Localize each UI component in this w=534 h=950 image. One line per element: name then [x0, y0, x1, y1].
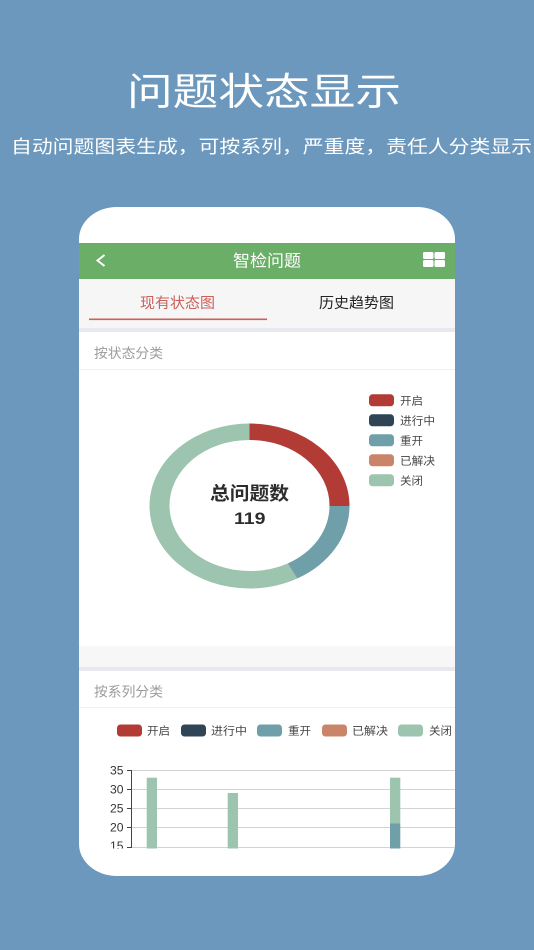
segment: open: [250, 424, 350, 506]
panel: green header bar: [79, 243, 455, 279]
legend: status chart: 开启: [400, 394, 423, 408]
legend: series chart: 开启: [147, 724, 170, 738]
tab: current status: 现有状态图: [140, 295, 215, 312]
donut total: 119: [234, 509, 266, 528]
panel: phone screen: [79, 207, 455, 876]
legend: status chart: [369, 394, 435, 488]
y axis labels: 20: [110, 822, 124, 834]
legend: status chart: 已解决: [400, 454, 435, 468]
legend: status chart: 重开: [400, 434, 423, 448]
y axis: [127, 770, 132, 848]
tab: history trend: 历史趋势图: [319, 295, 394, 312]
section gap: [79, 667, 455, 671]
legend: series chart: 重开: [288, 724, 311, 738]
panel: series section heading: 按系列分类: [94, 684, 163, 700]
legend: series chart: 进行中: [211, 724, 247, 738]
title: 问题状态显示: [127, 72, 401, 114]
bar chart: [110, 766, 455, 853]
donut chart: [150, 424, 350, 588]
legend: series chart: 关闭: [429, 724, 452, 738]
header title: 智检问题: [233, 252, 301, 270]
bars: [147, 778, 157, 848]
y axis labels: [110, 766, 123, 848]
panel: status section heading: 按状态分类: [94, 346, 163, 361]
y axis labels: 25: [110, 804, 124, 816]
legend: series chart: 已解决: [352, 724, 388, 738]
legend: status chart: 进行中: [400, 414, 435, 428]
segment: reopened: [288, 506, 350, 578]
segment: closed: [150, 424, 297, 588]
panel: tabs: [79, 279, 455, 332]
y axis labels: 30: [110, 784, 124, 796]
subtitle: 自动问题图表生成，可按系列，严重度，责任人分类显示: [11, 137, 532, 157]
tab underline: [89, 318, 267, 320]
legend: status chart: 关闭: [400, 474, 423, 488]
icon: back arrow: [98, 255, 104, 266]
donut centre label: 总问题数: [210, 483, 290, 504]
y axis labels: 15: [110, 841, 124, 853]
y axis labels: 35: [110, 766, 124, 778]
legend: series chart: [117, 724, 451, 736]
icon: grid menu: [423, 252, 445, 267]
